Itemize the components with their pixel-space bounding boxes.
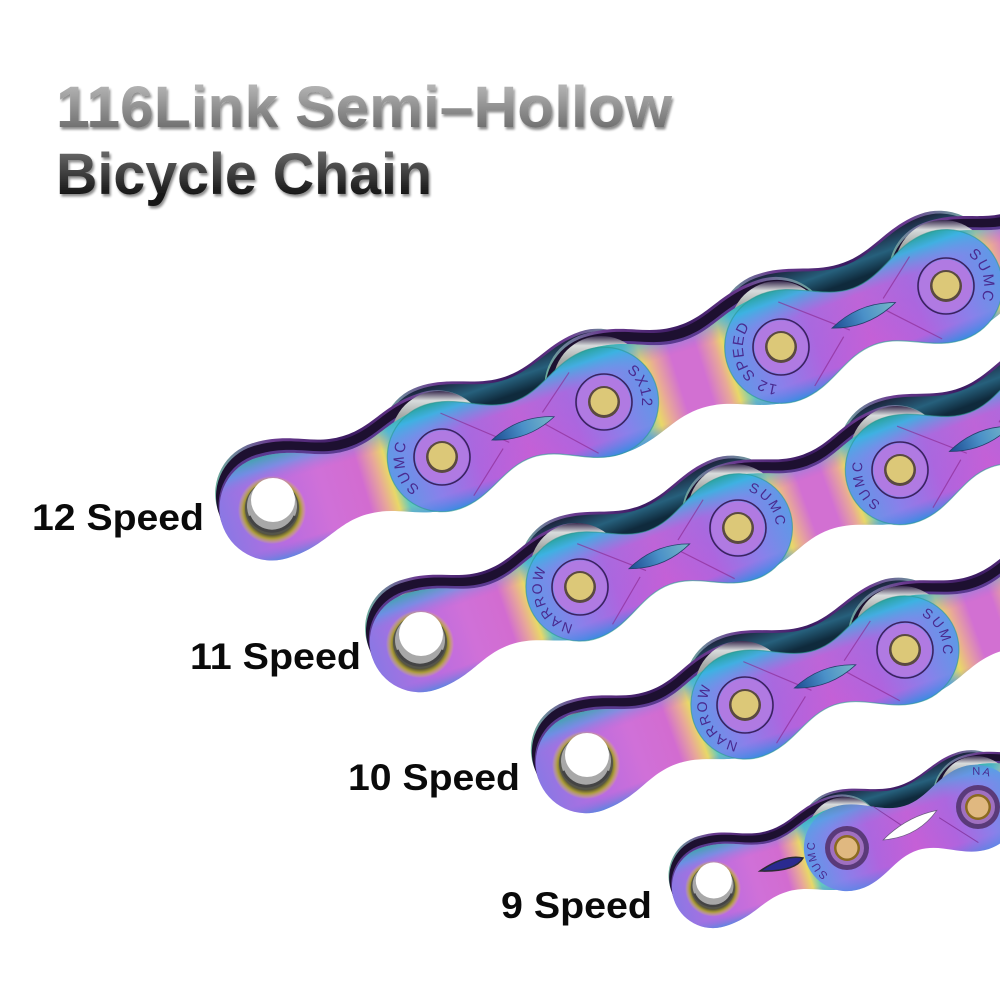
label: 12 speed: 12 Speed — [32, 497, 204, 538]
label: 11 speed: 11 Speed — [190, 636, 361, 677]
10 speed chain: NARROW — [697, 684, 738, 752]
9 speed chain: NA — [973, 767, 990, 776]
title line 1: 116Link Semi–Hollow — [56, 75, 673, 140]
label: 9 speed: 9 Speed — [501, 885, 652, 926]
12 speed chain: SX12 — [628, 365, 652, 406]
speed labels — [32, 497, 652, 926]
11 speed chain: NARROW — [532, 566, 572, 634]
11 speed chain: SUMC — [852, 462, 880, 510]
12 speed chain: SUMC — [970, 249, 994, 301]
12 speed chain: SUMC — [394, 442, 418, 494]
title — [56, 75, 673, 207]
10 speed chain — [530, 559, 1000, 814]
9 speed chain: SUMC — [807, 842, 827, 879]
12 speed chain: 12 SPEED — [732, 323, 776, 394]
9 speed chain — [668, 750, 1000, 928]
title line 2: Bicycle Chain — [56, 142, 432, 207]
12 speed chain — [215, 210, 1000, 614]
label: 10 speed: 10 Speed — [348, 757, 520, 798]
10 speed chain: SUMC — [922, 608, 953, 654]
11 speed chain — [365, 361, 1000, 746]
11 speed chain: SUMC — [750, 483, 786, 525]
